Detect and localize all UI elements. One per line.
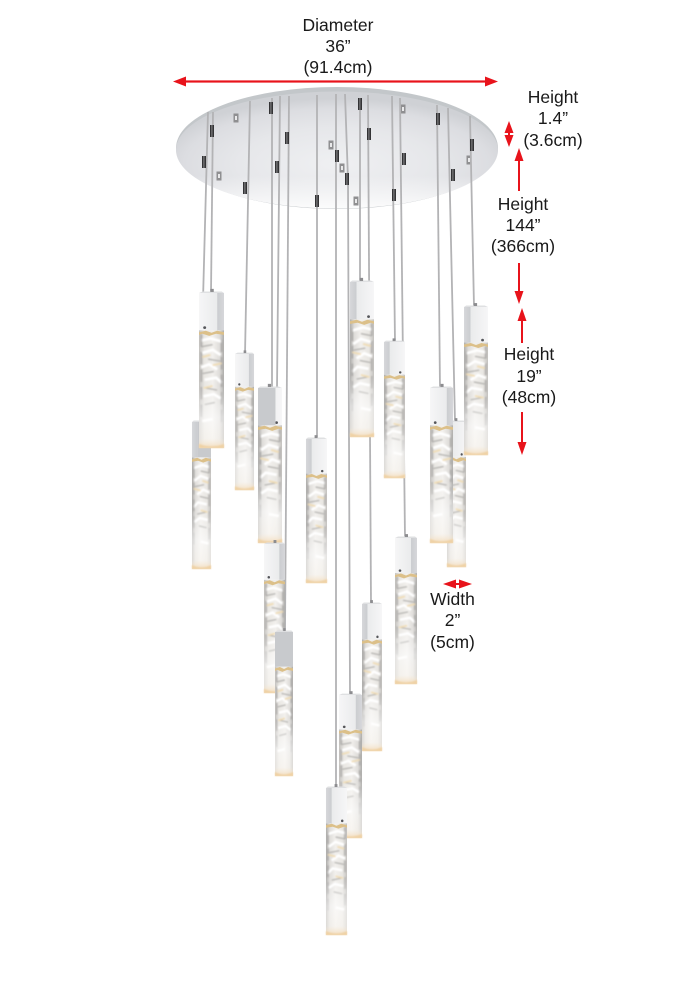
pendant 11 xyxy=(395,534,417,684)
cable grips xyxy=(202,98,474,207)
canopy: round ceiling plate xyxy=(176,87,498,209)
pendant 5 xyxy=(306,435,327,583)
pendant 9 xyxy=(447,418,466,567)
chandelier xyxy=(176,87,498,935)
label: width: Width xyxy=(430,589,475,609)
label: overall height: Height xyxy=(498,194,548,214)
label: canopy height: (3.6cm) xyxy=(523,130,583,150)
label: diameter: Diameter xyxy=(302,15,374,35)
label: canopy height: Height xyxy=(528,87,578,107)
label: pendant height: (48cm) xyxy=(502,387,556,407)
pendant 13 xyxy=(275,628,293,776)
pendant 3 xyxy=(235,350,254,490)
suspension cables xyxy=(203,94,474,788)
pendant 1 xyxy=(199,289,224,448)
pendant 16 xyxy=(326,784,347,935)
label: diameter: (91.4cm) xyxy=(303,57,373,77)
arrow: cable height upper xyxy=(514,148,524,191)
pendant 4 xyxy=(258,384,282,543)
pendant 8 xyxy=(430,384,453,543)
pendant 14 xyxy=(362,600,382,751)
label: width: (5cm) xyxy=(430,632,475,652)
label: width: 2” xyxy=(445,610,460,630)
label: diameter: 36” xyxy=(325,36,351,56)
arrow: canopy height xyxy=(504,121,514,147)
label: overall height: (366cm) xyxy=(491,236,555,256)
pendant 2 xyxy=(192,418,211,569)
pendant 6 xyxy=(350,278,374,437)
label: canopy height: 1.4” xyxy=(538,108,568,128)
label: pendant height: Height xyxy=(504,344,554,364)
arrow: pendant height lower xyxy=(518,412,526,455)
pendant 12 xyxy=(264,540,285,693)
arrow: diameter xyxy=(173,76,498,86)
pendant 15 xyxy=(339,691,362,838)
arrow: pendant height upper xyxy=(518,308,526,343)
pendant 7 xyxy=(384,338,405,478)
label: pendant height: 19” xyxy=(516,366,542,386)
label: overall height: 144” xyxy=(505,215,541,235)
arrow: cable height lower xyxy=(514,263,524,304)
canopy mounting clips xyxy=(216,104,472,206)
pendant 10 xyxy=(464,303,488,455)
arrow: width xyxy=(443,580,472,588)
